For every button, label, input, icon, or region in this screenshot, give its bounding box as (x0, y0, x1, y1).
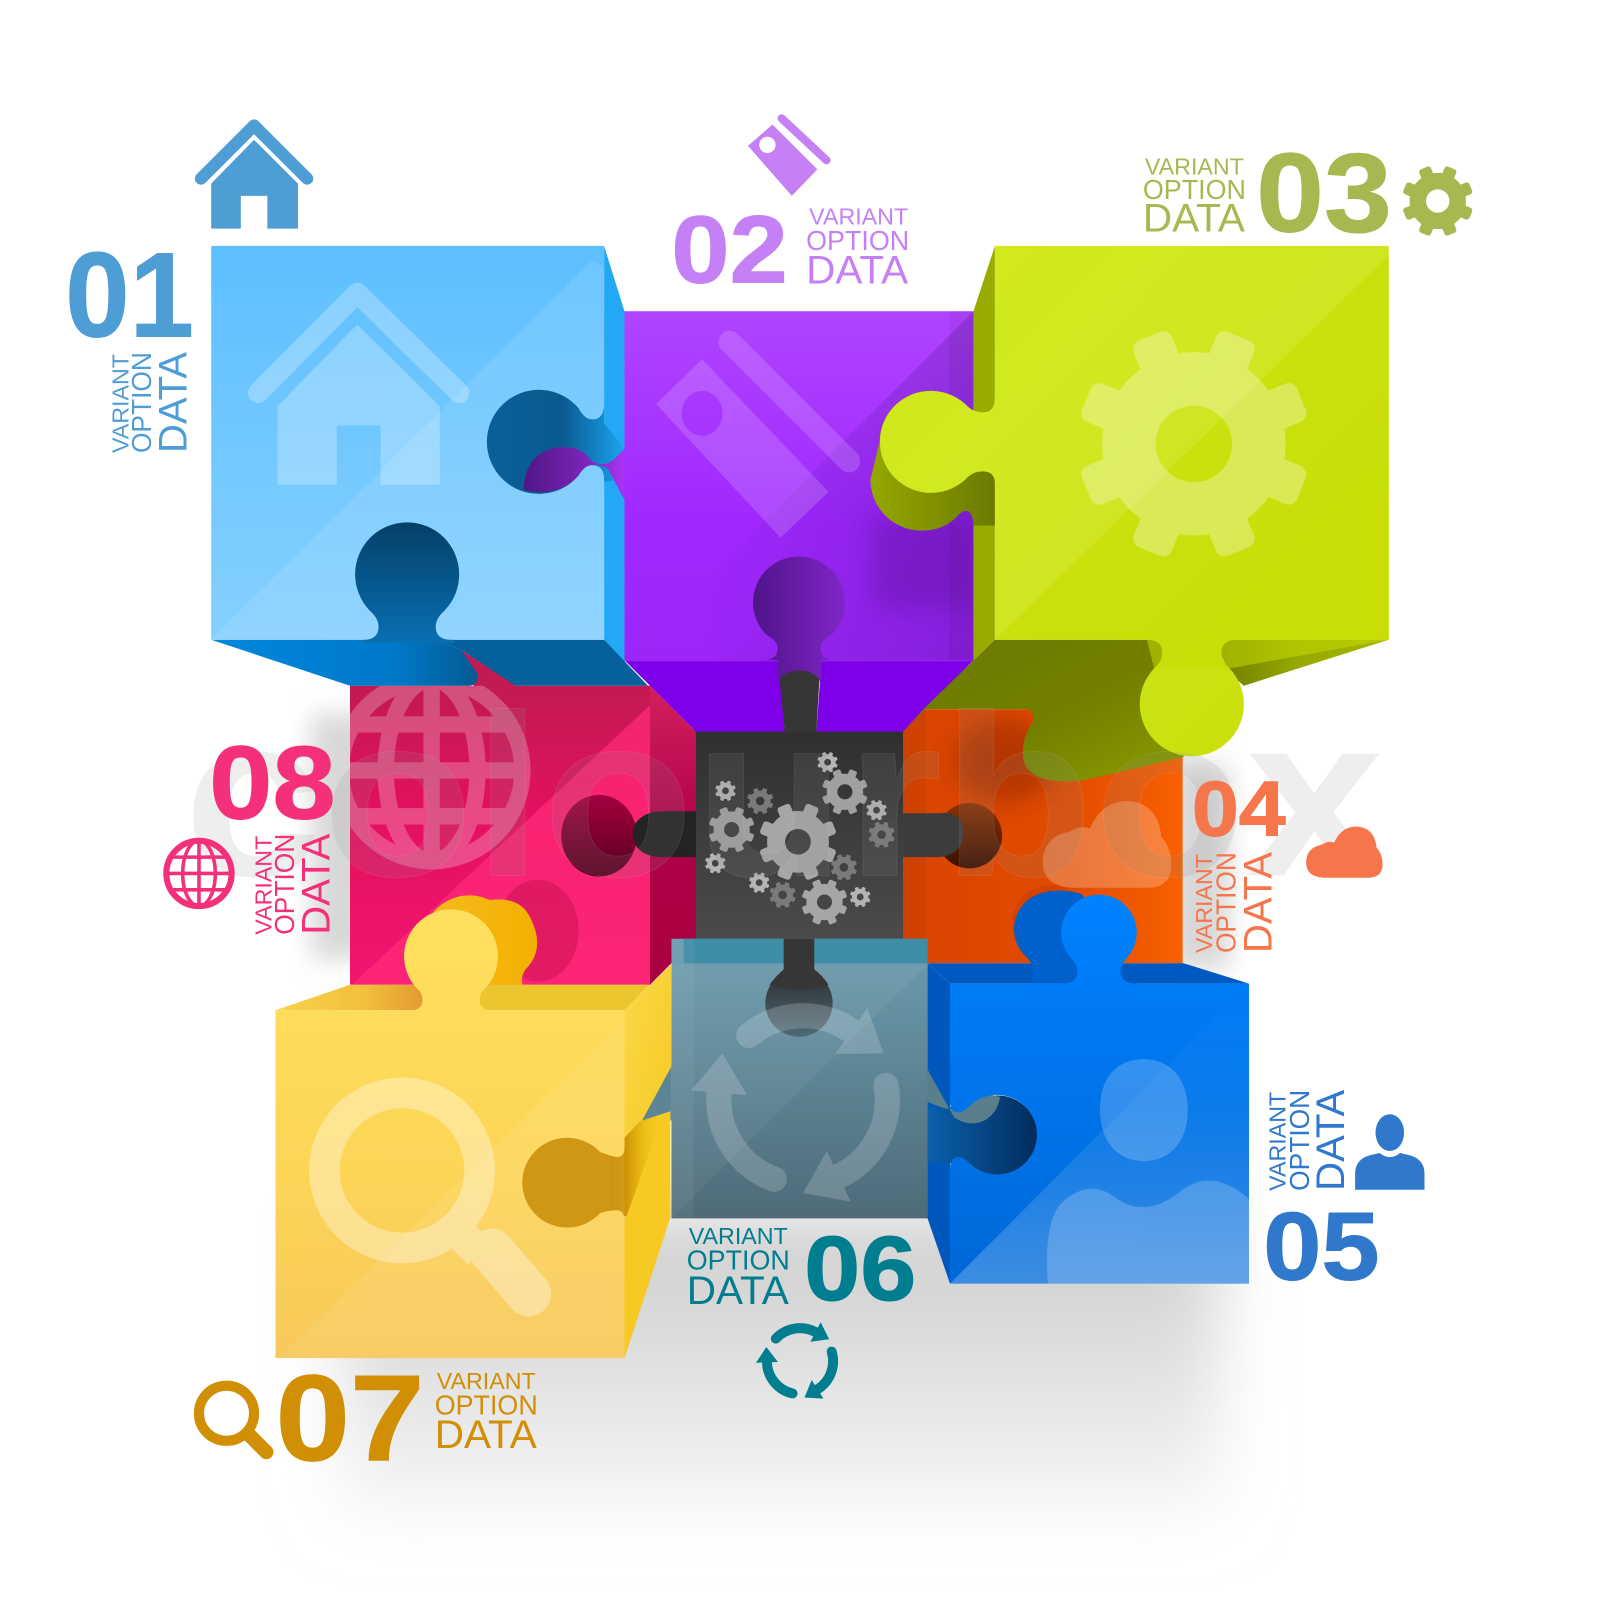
number 03: 03 (1256, 130, 1392, 256)
number 07: 07 (276, 1349, 424, 1486)
icon: card (748, 118, 827, 196)
icon: person (1355, 1114, 1424, 1190)
label 03 (1143, 130, 1473, 256)
text: variant option data (1143, 153, 1246, 241)
icon: magnifier (199, 1386, 266, 1452)
panel: piece 04 orange (903, 709, 1183, 963)
text: variant option data: OPTION (1143, 174, 1246, 205)
text: variant option data: DATA (1309, 1089, 1353, 1191)
text: variant option data: OPTION (687, 1244, 790, 1275)
text: variant option data: OPTION (269, 834, 300, 935)
text: variant option data: DATA (687, 1269, 789, 1313)
icon: house watermark (258, 293, 459, 485)
text: variant option data: DATA (152, 352, 196, 453)
text: variant option data: DATA (1143, 197, 1245, 241)
text: variant option data (1191, 852, 1280, 953)
panel: piece 07 yellow (276, 895, 671, 1358)
number 05: 05 (1263, 1192, 1380, 1301)
label 08 (166, 725, 339, 935)
background shadow (311, 714, 1230, 1510)
icon: recycle watermark (683, 1008, 910, 1216)
text: variant option data: OPTION (806, 225, 909, 256)
number 02: 02 (671, 197, 788, 304)
hole: right (484, 386, 624, 498)
label 01 (65, 126, 307, 453)
panel: piece 08 pink (341, 650, 696, 985)
text: variant option data: VARIANT (689, 1223, 788, 1249)
panel: piece 01 blue (211, 246, 648, 686)
number 04: 04 (1192, 767, 1286, 853)
text: variant option data: VARIANT (809, 203, 908, 229)
icon: house (201, 126, 307, 229)
panel: piece 06 teal (635, 939, 928, 1218)
icon: magnifier watermark (309, 1078, 529, 1294)
icon: globe (166, 841, 232, 906)
text: variant option data: DATA (295, 833, 339, 935)
text: variant option data: VARIANT (108, 354, 134, 453)
text: variant option data: DATA (806, 249, 909, 293)
text: variant option data: VARIANT (437, 1368, 536, 1394)
icon: cloud (1306, 827, 1383, 878)
text: variant option data (435, 1368, 538, 1457)
text: variant option data (1265, 1089, 1353, 1191)
text: variant option data: VARIANT (1145, 153, 1244, 179)
text: variant option data: DATA (435, 1413, 537, 1457)
text: variant option data (250, 833, 339, 935)
label 04 (1191, 767, 1383, 953)
number 06: 06 (804, 1218, 916, 1320)
text: variant option data: OPTION (435, 1389, 538, 1420)
text: variant option data (108, 352, 196, 453)
text: variant option data: VARIANT (1191, 854, 1217, 953)
text: variant option data (806, 203, 909, 293)
icon: cloud watermark (1043, 801, 1171, 888)
panel: piece 05 blue (928, 891, 1249, 1284)
watermark: colourbox (184, 667, 1384, 925)
icon: card watermark (656, 359, 829, 538)
text: variant option data: VARIANT (250, 836, 276, 935)
text: variant option data: OPTION (126, 352, 157, 453)
label 05 (1263, 1089, 1424, 1301)
panel: piece 03 green (870, 246, 1389, 781)
text: variant option data: OPTION (1211, 852, 1242, 953)
center panel with gears (694, 730, 905, 941)
icon: gear (1402, 166, 1473, 236)
text: variant option data: VARIANT (1265, 1092, 1291, 1191)
label 06 (687, 1218, 916, 1412)
label 02 (671, 118, 909, 304)
label 07 (199, 1349, 538, 1486)
text: variant option data: DATA (1236, 852, 1280, 953)
icon: gear watermark (1078, 328, 1309, 559)
text: variant option data: OPTION (1284, 1090, 1315, 1191)
icon: person watermark (1047, 1059, 1249, 1284)
panel: piece 02 purple (624, 311, 974, 732)
number 01: 01 (65, 228, 194, 363)
icon: recycle (749, 1320, 847, 1412)
hole: bottom (351, 518, 463, 643)
icon: globe watermark (341, 680, 522, 861)
text: variant option data (687, 1223, 790, 1313)
number 08: 08 (209, 725, 336, 841)
